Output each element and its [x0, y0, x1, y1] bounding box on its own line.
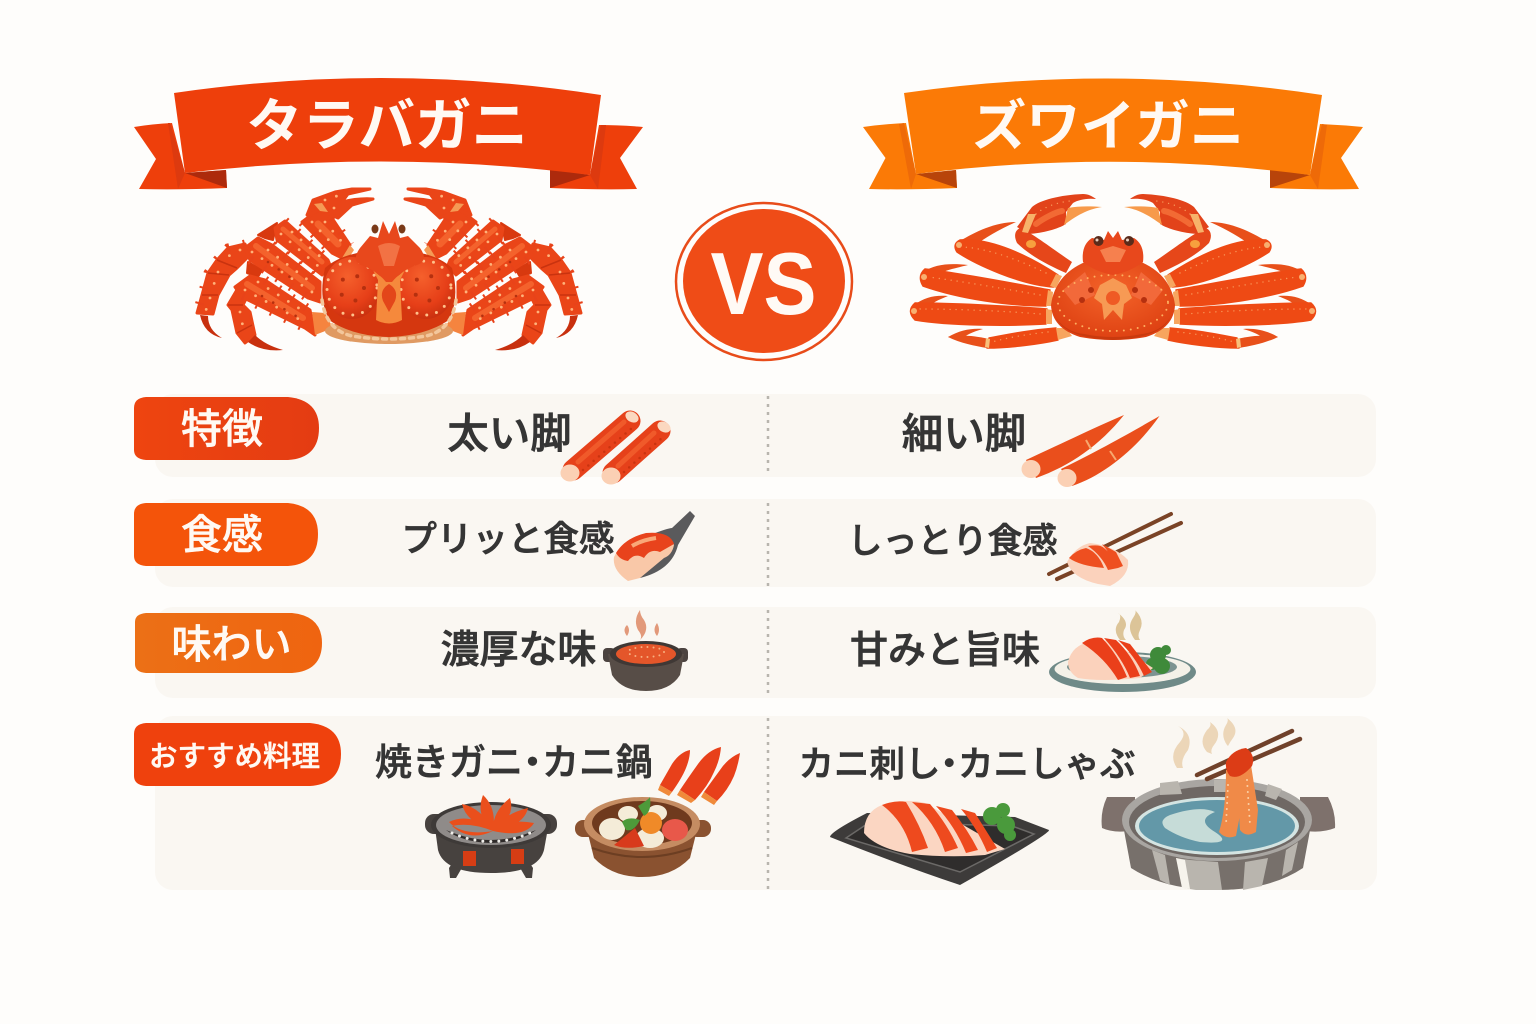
panel: 特徴 row: [134, 394, 1376, 487]
label: 特徴: 特徴: [181, 406, 263, 452]
label: おすすめ料理: おすすめ料理: [149, 741, 320, 773]
icon: clay pot stew: [575, 797, 711, 877]
panel: おすすめ料理 row: [134, 716, 1377, 890]
panel: 味わい row: [135, 607, 1376, 698]
icon: thick crab legs: [560, 409, 673, 484]
banner title: タラバガニ: [246, 94, 528, 157]
icon: plated crab: [1049, 610, 1196, 692]
label: 味わい: 味わい: [172, 623, 292, 667]
label: おすすめ料理: [134, 723, 341, 786]
banner: ズワイガニ: [863, 78, 1363, 189]
icon: three crab legs: [658, 747, 740, 805]
icon: stew pot with steam: [603, 610, 688, 691]
icon: shabu-shabu pot: [1102, 718, 1335, 890]
banner: タラバガニ: [134, 78, 643, 189]
icon: charcoal grill with crab: [425, 795, 557, 878]
text: しっとり食感: しっとり食感: [847, 522, 1058, 561]
illustration: king crab: [197, 189, 581, 350]
text: 濃厚な味: 濃厚な味: [440, 629, 597, 672]
text: プリッと食感: プリッと食感: [401, 519, 615, 559]
text: 焼きガニ・カニ鍋: 焼きガニ・カニ鍋: [375, 742, 653, 783]
text: 太い脚: 太い脚: [447, 410, 572, 457]
banner title: ズワイガニ: [972, 96, 1244, 157]
label: 食感: [134, 503, 318, 566]
icon: chopsticks with crab meat: [1049, 514, 1181, 586]
text: 細い脚: 細い脚: [902, 410, 1026, 457]
VS badge: [676, 203, 852, 360]
icon: spoon with crab meat: [614, 511, 695, 581]
label: 特徴: [134, 397, 319, 460]
icon: thin crab legs: [1022, 415, 1160, 487]
VS text: VS: [710, 234, 816, 333]
text: カニ刺し・カニしゃぶ: カニ刺し・カニしゃぶ: [798, 744, 1136, 784]
label: 味わい: [135, 613, 322, 673]
icon: sashimi plate: [830, 801, 1049, 885]
panel: 食感 row: [134, 499, 1376, 587]
illustration: snow crab: [910, 194, 1316, 348]
label: 食感: 食感: [181, 512, 263, 558]
text: 甘みと旨味: 甘みと旨味: [850, 630, 1040, 672]
